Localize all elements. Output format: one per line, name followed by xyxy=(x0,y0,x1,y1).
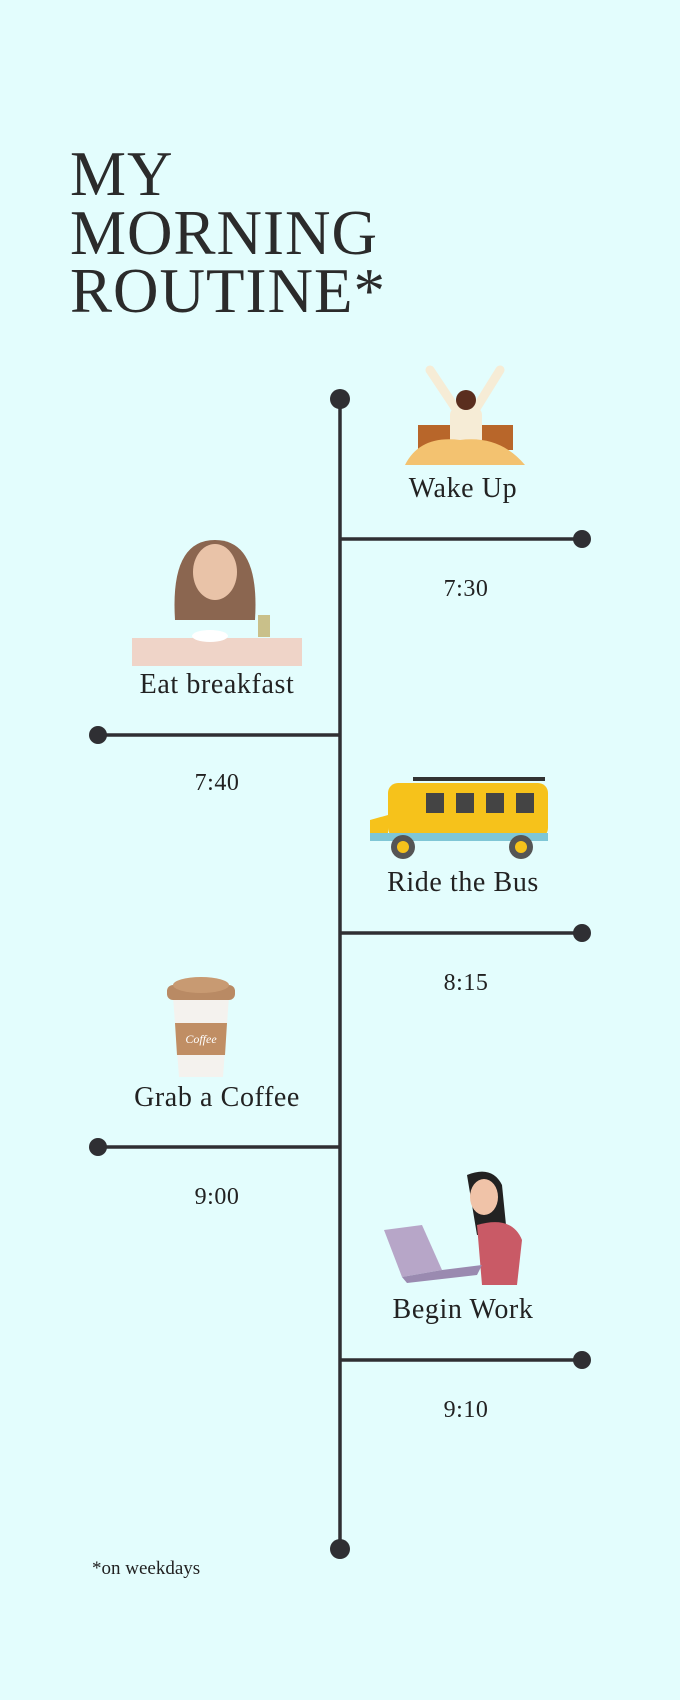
time: 7:30: 7:30 xyxy=(444,576,488,602)
title: MY xyxy=(70,139,174,209)
icon: bus xyxy=(370,777,548,859)
title: MORNING xyxy=(70,198,378,268)
icon: wake up xyxy=(405,366,525,465)
footnote: *on weekdays xyxy=(92,1558,200,1579)
label: grab a coffee: Grab a Coffee xyxy=(134,1082,300,1113)
icon: coffee: Coffee xyxy=(185,1032,217,1046)
icon: begin work xyxy=(384,1172,522,1285)
label: wake up: Wake Up xyxy=(409,473,517,504)
label: eat breakfast: Eat breakfast xyxy=(140,669,294,700)
title: ROUTINE* xyxy=(70,256,386,326)
time: 9:00: 9:00 xyxy=(195,1184,239,1210)
label: ride the bus: Ride the Bus xyxy=(387,867,539,898)
time: 9:10: 9:10 xyxy=(444,1397,488,1423)
time: 8:15: 8:15 xyxy=(444,970,488,996)
title xyxy=(70,139,386,326)
icon: coffee xyxy=(167,977,235,1077)
time: 7:40: 7:40 xyxy=(195,770,239,796)
icon: breakfast xyxy=(132,540,302,666)
label: begin work: Begin Work xyxy=(393,1294,533,1325)
